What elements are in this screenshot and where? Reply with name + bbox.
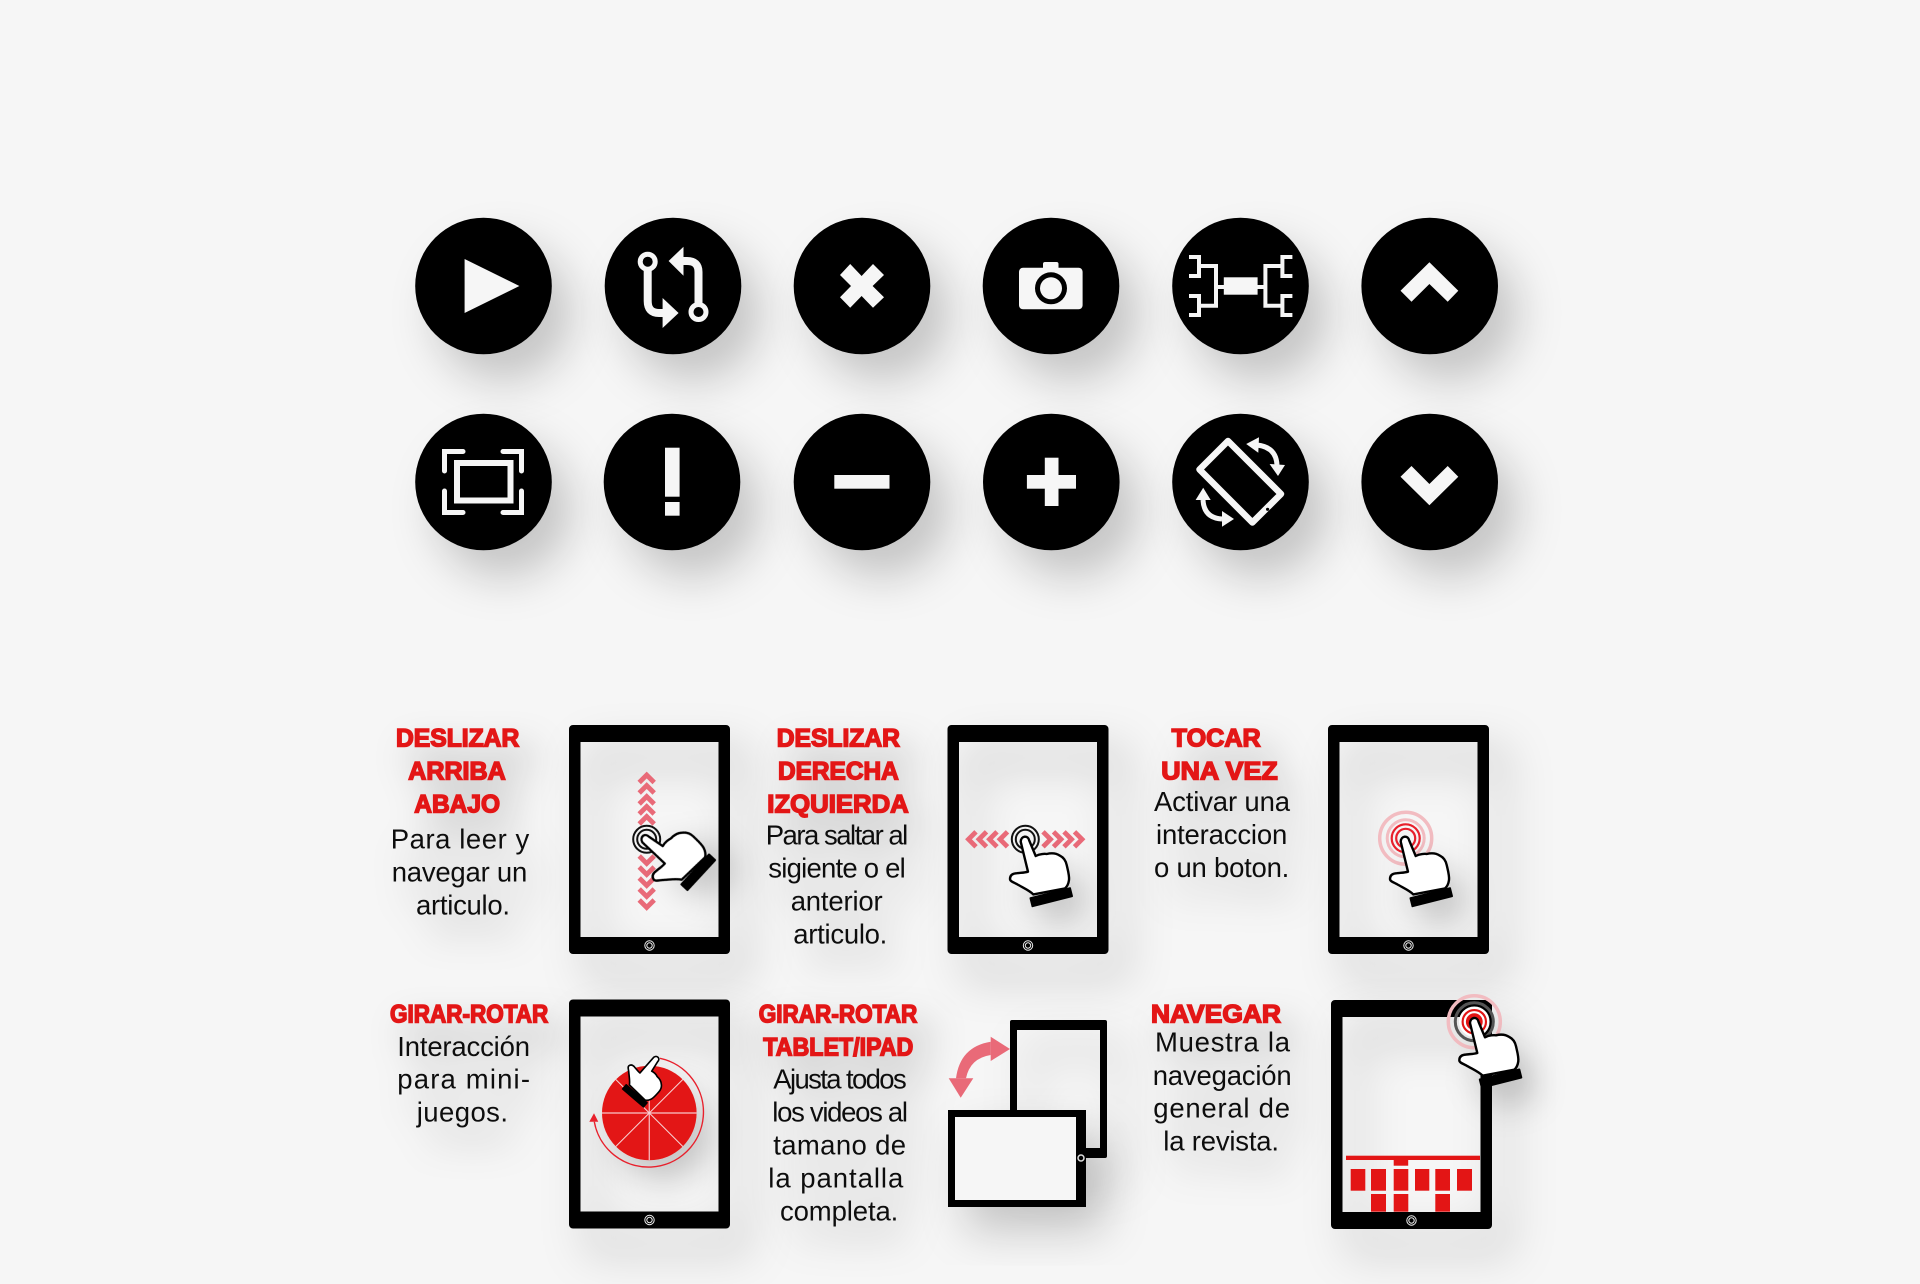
text: navegar: navegación xyxy=(1153,1060,1292,1091)
icon: pointing hand xyxy=(1390,837,1452,906)
text: navegar: la revista. xyxy=(1163,1126,1279,1157)
text: deslizar arriba abajo: Para leer y xyxy=(391,823,530,854)
panel: girar rotar tablet xyxy=(759,1001,1107,1227)
text: deslizar derecha izquierda: DERECHA xyxy=(778,757,899,785)
icon: pointing hand xyxy=(1459,1018,1521,1088)
curved rotation arrow xyxy=(949,1037,1010,1098)
icon: swap paths xyxy=(605,218,741,354)
text: navegar: Muestra la xyxy=(1155,1027,1291,1058)
text: girar rotar xyxy=(390,1001,548,1128)
icon: pointing hand xyxy=(614,1049,677,1111)
icon: pointing hand xyxy=(631,810,721,902)
text: deslizar arriba abajo: ARRIBA xyxy=(408,757,506,785)
icon: minus xyxy=(794,414,930,550)
text: girar rotar: para mini- xyxy=(397,1064,530,1095)
touch rings xyxy=(633,826,660,853)
touch rings xyxy=(1380,812,1432,864)
icon: rotate device xyxy=(1172,414,1309,550)
text: girar rotar tablet: Ajusta todos xyxy=(773,1063,907,1094)
text: deslizar arriba abajo xyxy=(391,725,530,920)
tablet frame xyxy=(948,725,1108,954)
text: girar rotar tablet: TABLET/IPAD xyxy=(763,1033,913,1061)
icon: pointing hand xyxy=(1010,837,1072,906)
tablet frame xyxy=(569,1000,730,1228)
text: girar rotar tablet: tamano de xyxy=(773,1130,906,1161)
text: tocar una vez xyxy=(1154,725,1291,883)
panel: girar rotar xyxy=(390,1000,730,1228)
red wheel xyxy=(602,1066,697,1160)
horizontal chevrons xyxy=(968,832,1082,847)
home button xyxy=(1078,1155,1084,1161)
text: girar rotar tablet xyxy=(759,1001,917,1227)
panel: navegar xyxy=(1151,996,1521,1229)
tablet frame xyxy=(1328,725,1489,954)
text: deslizar derecha izquierda: sigiente o el xyxy=(768,853,906,884)
text: tocar una vez: o un boton. xyxy=(1154,852,1289,883)
rotation arrow xyxy=(589,1058,703,1167)
text: deslizar arriba abajo: DESLIZAR xyxy=(396,725,519,753)
icon: chassis diagram xyxy=(1172,218,1309,354)
text: tocar una vez: UNA VEZ xyxy=(1161,758,1278,786)
text: deslizar derecha izquierda: articulo. xyxy=(793,919,887,950)
icon: plus xyxy=(983,414,1120,550)
icon: chevron down xyxy=(1361,414,1498,550)
icon: close xyxy=(794,218,930,354)
text: deslizar arriba abajo: ABAJO xyxy=(414,791,500,819)
text: tocar una vez: interaccion xyxy=(1156,819,1287,850)
icon: alert xyxy=(604,414,740,550)
landscape tablet xyxy=(948,1110,1086,1207)
vertical chevrons xyxy=(639,775,654,908)
text: deslizar derecha izquierda xyxy=(766,725,909,950)
text: deslizar derecha izquierda: IZQUIERDA xyxy=(767,791,909,819)
text: deslizar arriba abajo: articulo. xyxy=(416,889,510,920)
tablet frame xyxy=(1331,1000,1492,1229)
text: girar rotar tablet: completa. xyxy=(780,1196,898,1227)
text: navegar: general de xyxy=(1153,1093,1290,1124)
touch rings xyxy=(1012,826,1039,853)
text: tocar una vez: TOCAR xyxy=(1172,725,1261,753)
text: girar rotar: GIRAR-ROTAR xyxy=(390,1001,548,1029)
icon: arrow up xyxy=(1361,218,1498,354)
text: deslizar derecha izquierda: DESLIZAR xyxy=(777,725,900,753)
text: deslizar arriba abajo: navegar un xyxy=(392,857,527,888)
panel: tocar una vez xyxy=(1154,725,1489,954)
panel: deslizar derecha izquierda xyxy=(766,725,1108,954)
tablet frame xyxy=(569,725,730,954)
text: deslizar derecha izquierda: Para saltar al xyxy=(766,819,908,850)
text: girar rotar: juegos. xyxy=(416,1097,508,1128)
navigation menu xyxy=(1346,1156,1480,1212)
text: girar rotar tablet: la pantalla xyxy=(768,1163,904,1194)
touch rings xyxy=(1448,996,1500,1048)
icon: camera xyxy=(983,218,1119,354)
text: girar rotar tablet: los videos al xyxy=(772,1097,908,1128)
text: deslizar derecha izquierda: anterior xyxy=(791,885,883,916)
portrait tablet xyxy=(1010,1020,1107,1158)
text: navegar xyxy=(1151,1001,1292,1157)
text: girar rotar: Interacción xyxy=(397,1031,530,1062)
icon: fullscreen xyxy=(415,414,552,550)
icon: play xyxy=(415,218,552,354)
text: tocar una vez: Activar una xyxy=(1154,786,1291,817)
text: girar rotar tablet: GIRAR-ROTAR xyxy=(759,1001,917,1029)
text: navegar: NAVEGAR xyxy=(1151,1001,1281,1029)
panel: deslizar arriba abajo xyxy=(391,725,730,954)
